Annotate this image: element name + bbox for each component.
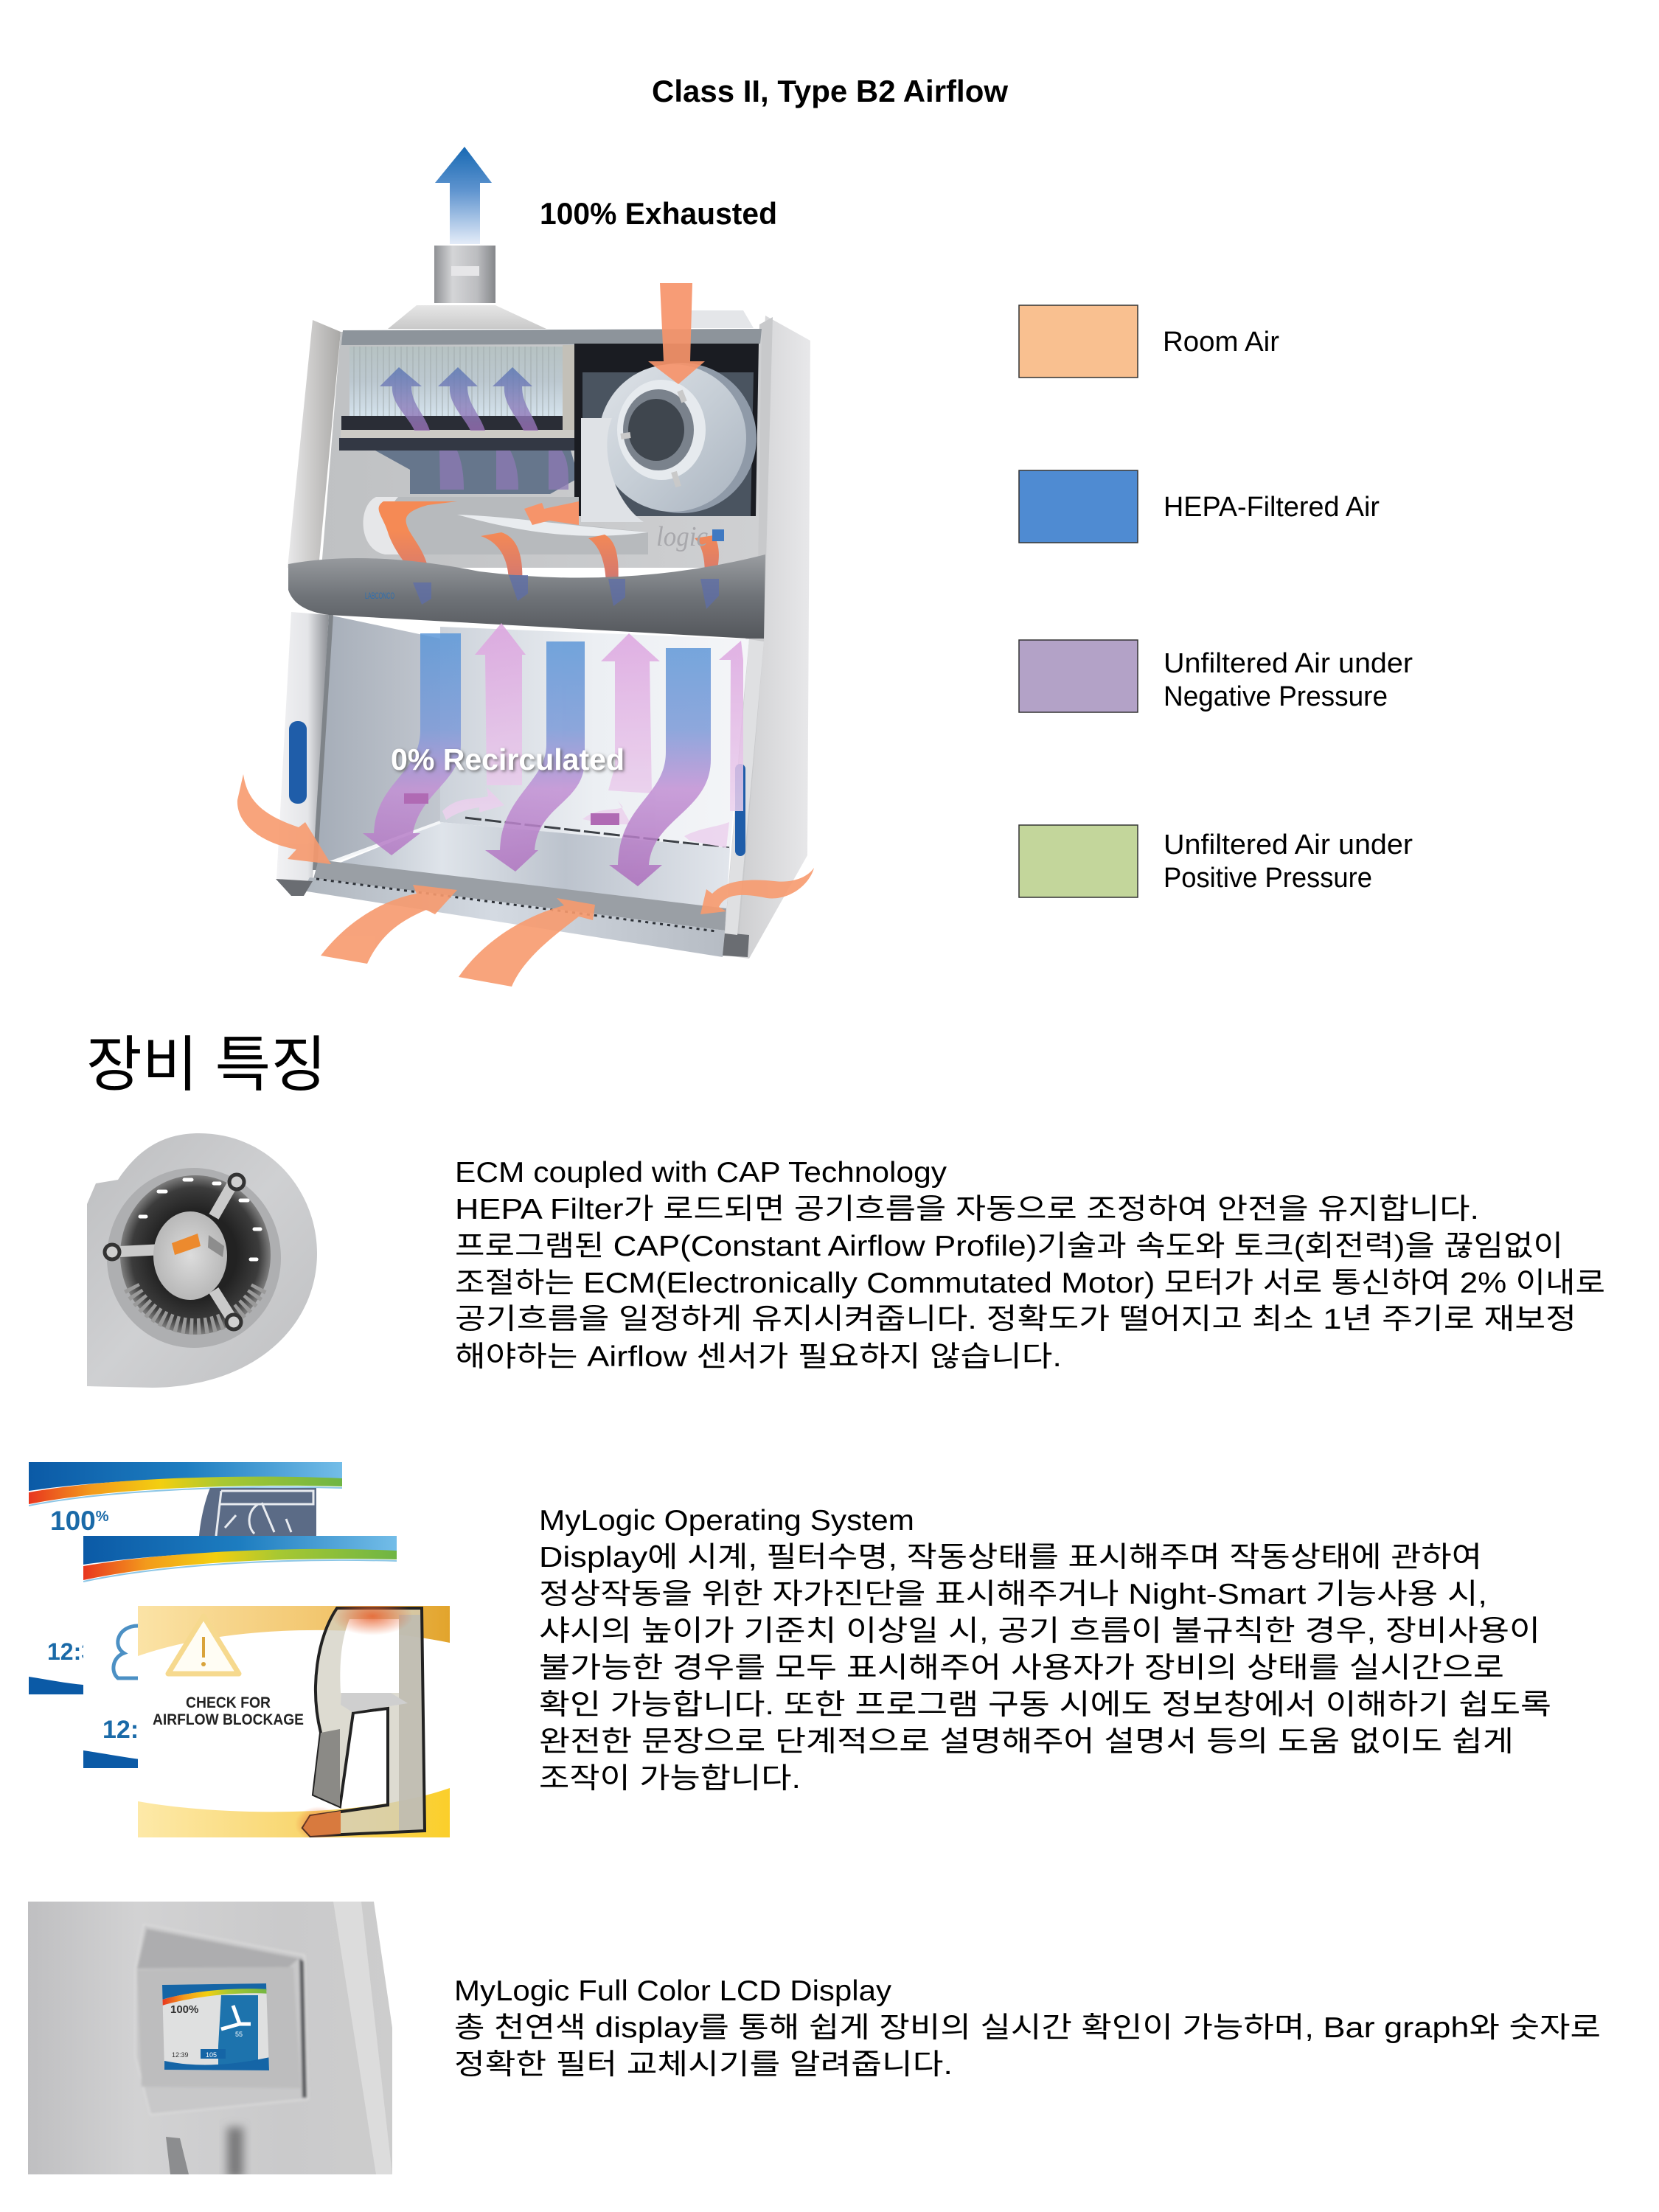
HEPA filter: [339, 345, 577, 451]
chamber top: [341, 1693, 408, 1712]
text: MyLogic full color LCD: 정확한 필터 교체시기를 알려줍니다.: [454, 2049, 953, 2081]
legend: HEPA label: HEPA-Filtered Air: [1164, 492, 1380, 523]
text: MyLogic operating system: 확인 가능합니다. 또한 프로그램 구동 시에도 정보창에서 이해하기 쉽도록: [539, 1689, 1551, 1721]
fan compartment: [574, 344, 759, 516]
warning message: [153, 1697, 304, 1725]
screen readout: 100%: [170, 2003, 198, 2016]
text: MyLogic full color LCD: [454, 1975, 1601, 2081]
work surface: [319, 822, 730, 916]
glass frame edge: [313, 615, 333, 870]
white corner: [374, 1902, 392, 2028]
text: MyLogic operating system: 완전한 문장으로 단계적으로 설명해주어 설명서 등의 도움 없이도 쉽게: [539, 1726, 1514, 1758]
fan compartment wall: [582, 372, 754, 516]
top frame bar: [341, 329, 762, 345]
right post: [723, 317, 773, 956]
light side strip: [333, 1902, 392, 2174]
logic wordmark: logic: [656, 521, 708, 552]
control label left: [289, 721, 307, 804]
text: MyLogic operating system: MyLogic Operating System: [539, 1505, 914, 1537]
legend: [1019, 305, 1413, 897]
chrome slot: [166, 2137, 189, 2174]
legend: positive pressure label: Positive Pressure: [1164, 863, 1372, 894]
text: MyLogic operating system: 샤시의 높이가 기준치 이상일 시, 공기 흐름이 불규칙한 경우, 장비사용이: [539, 1615, 1540, 1647]
section heading: 장비 특징: [86, 1032, 327, 1099]
lower shadow: [227, 2127, 243, 2179]
bottom corners: [276, 879, 749, 957]
text: MyLogic operating system: 정상작동을 위한 자가진단을 표시해주거나 Night-Smart 기능사용 시,: [539, 1579, 1487, 1610]
stainless background: [28, 1902, 392, 2174]
blower housing: [87, 1133, 317, 1388]
orange label: [172, 1234, 201, 1255]
text: ECM coupled with CAP: 프로그램된 CAP(Constant Airflow Profile)기술과 속도와 토크(회전력)을 끊임없이: [455, 1231, 1563, 1262]
back wall slot: [465, 818, 729, 848]
screen card 1: 12:3: [47, 1638, 94, 1665]
legend: negative pressure label: Negative Pressure: [1164, 681, 1388, 712]
lower chamber side wall: [313, 615, 440, 870]
legend: negative pressure swatch: [1019, 640, 1138, 712]
hood transition: [388, 305, 546, 329]
screen card 1: 100: [50, 1506, 96, 1536]
plenum: [375, 451, 579, 494]
legend: room air label: Room Air: [1163, 327, 1279, 358]
left upper post: [288, 320, 341, 568]
photo: ECM blower motor: [87, 1133, 317, 1388]
orange glow bottom: [296, 1807, 336, 1837]
LCD screen: 12:39: [172, 2051, 189, 2059]
housing inlet rim: [107, 1168, 281, 1348]
arrow: room air into blower: [524, 283, 705, 525]
right lower post highlight: [725, 639, 764, 935]
interior window cut: [340, 1619, 399, 1693]
legend: positive pressure swatch: [1019, 825, 1138, 897]
motor hub: [153, 1211, 227, 1300]
glass floor reflection: [330, 822, 440, 863]
purple markers: [404, 793, 619, 825]
legend: HEPA swatch: [1019, 470, 1138, 543]
text: ECM coupled with CAP: [455, 1157, 1605, 1373]
nameplate: [208, 1235, 224, 1257]
perforation row: [316, 879, 716, 931]
control label right: [735, 764, 745, 856]
blower fan: [581, 363, 757, 522]
0% recirculated label: 0% Recirculated: [391, 742, 625, 776]
front grille: [313, 860, 726, 931]
exhaust duct: [434, 246, 495, 303]
100% exhausted label: 100% Exhausted: [540, 196, 777, 231]
mount bolts: [105, 1175, 244, 1329]
photo: MyLogic screens: [29, 1462, 450, 1842]
legend: negative pressure label: Unfiltered Air under: [1164, 648, 1413, 679]
warning message: CHECK FOR: [186, 1694, 271, 1711]
vent holes: [140, 1180, 260, 1259]
text: MyLogic operating system: [539, 1505, 1551, 1795]
upper interior: [321, 329, 762, 568]
photo: LCD display panel: [28, 1902, 392, 2179]
arrow tips in band: [413, 575, 719, 609]
title: Class II, Type B2 Airflow: [652, 74, 1008, 108]
orange glow top: [334, 1606, 410, 1635]
LCD screen: 105: [206, 2051, 217, 2059]
screen card 2: 12:3: [102, 1716, 153, 1744]
arrows: pink rising air: [442, 623, 743, 848]
legend: positive pressure label: [1164, 830, 1413, 894]
text: ECM coupled with CAP: 조절하는 ECM(Electronically Commutated Motor) 모터가 서로 통신하여 2% 이내로: [455, 1267, 1605, 1299]
arrows: orange into dark band: [379, 501, 719, 609]
text: MyLogic operating system: Display에 시계, 필터수명, 작동상태를 표시해주며 작동상태에 관하여: [539, 1542, 1482, 1573]
impeller blades: [131, 1287, 260, 1326]
motor mount arms: [112, 1182, 234, 1322]
left lower post: [276, 612, 329, 881]
text: ECM coupled with CAP: 해야하는 Airflow 센서가 필요하지 않습니다.: [455, 1341, 1062, 1373]
screen card 1: [29, 1462, 342, 1694]
front lip: [302, 877, 725, 957]
dark impeller opening: [120, 1175, 271, 1335]
right side panel: [726, 316, 810, 959]
warning triangle: [168, 1616, 239, 1674]
text: MyLogic full color LCD: 총 천연색 display를 통해 쉽게 장비의 실시간 확인이 가능하며, Bar graph와 숫자로: [454, 2012, 1601, 2044]
LABCONCO badge: LABCONCO: [365, 591, 394, 601]
text: MyLogic operating system: 조작이 가능합니다.: [539, 1763, 801, 1795]
arrow: exhaust upward: [435, 147, 492, 244]
text: ECM coupled with CAP: ECM coupled with CAP Technology: [455, 1157, 947, 1189]
airflow diagram: biosafety cabinet: [237, 147, 814, 987]
legend: negative pressure label: [1164, 648, 1413, 712]
sash: [313, 1729, 340, 1806]
control box on top: [690, 310, 754, 328]
yellow lower arc: [138, 1788, 450, 1837]
screen card 2: [83, 1536, 397, 1768]
LCD screen: [162, 1983, 270, 2070]
text: MyLogic operating system: 불가능한 경우를 모두 표시해주어 사용자가 장비의 상태를 실시간으로: [539, 1652, 1504, 1684]
screen card 3 warning: [138, 1597, 450, 1842]
plenum purple bands: [439, 451, 568, 490]
arrows: room air at front: [237, 774, 814, 987]
diffuser scroll: [364, 497, 648, 554]
cabinet outline: [303, 1608, 425, 1836]
arrows: blue to purple downflow: [363, 633, 711, 886]
bottom intake: [303, 1811, 341, 1836]
text: ECM coupled with CAP: HEPA Filter가 로드되면 공기흐름을 자동으로 조정하여 안전을 유지합니다.: [455, 1194, 1479, 1225]
text: MyLogic full color LCD: MyLogic Full Color LCD Display: [454, 1975, 892, 2007]
arrows: purple through filter: [380, 367, 538, 431]
legend: positive pressure label: Unfiltered Air under: [1164, 830, 1413, 860]
cabinet back panel: [399, 1615, 423, 1832]
text: ECM coupled with CAP: 공기흐름을 일정하게 유지시켜줍니다. 정확도가 떨어지고 최소 1년 주기로 재보정: [455, 1304, 1576, 1335]
screen card 1: %: [96, 1509, 109, 1525]
warning message: AIRFLOW BLOCKAGE: [153, 1711, 304, 1728]
LCD screen: 55: [235, 2031, 243, 2038]
front dark band: [288, 554, 765, 639]
bezel: [136, 1924, 308, 2115]
yellow upper arc: [138, 1606, 450, 1656]
lower chamber back wall: [440, 627, 749, 848]
legend: room air swatch: [1019, 305, 1138, 378]
